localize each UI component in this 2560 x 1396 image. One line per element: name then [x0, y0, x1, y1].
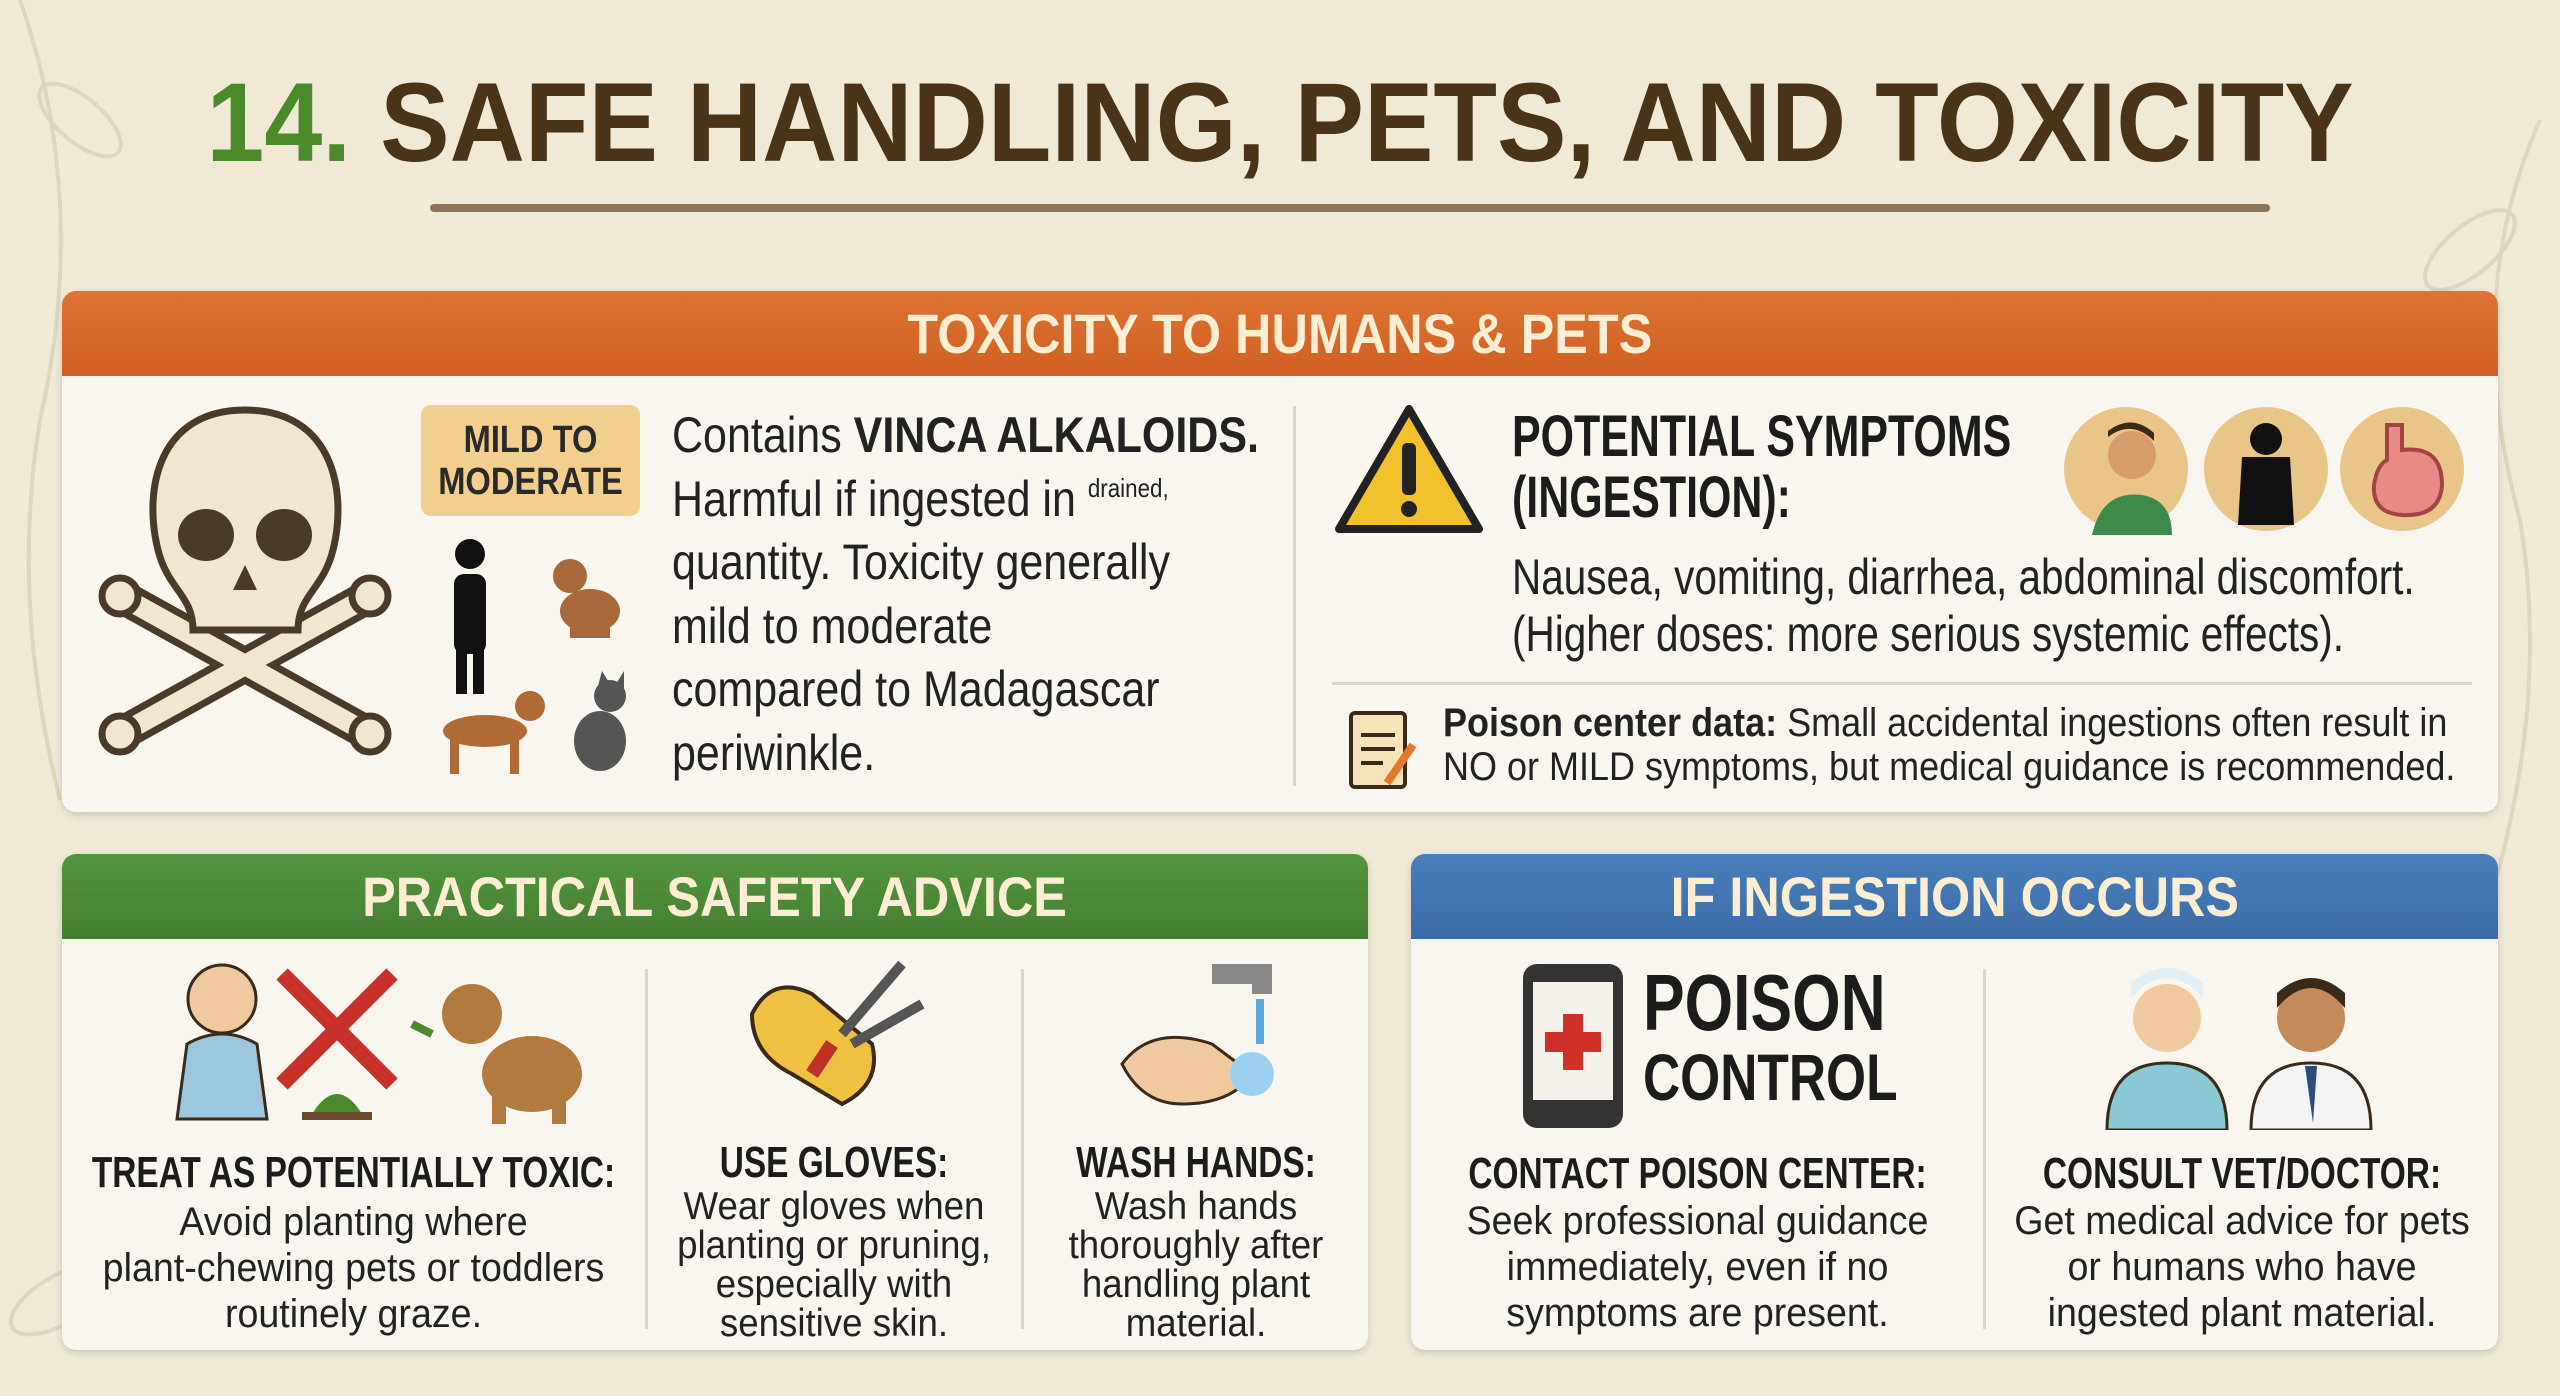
- icon: baby, cross, dog: [175, 964, 582, 1124]
- heading: potential symptoms: [1512, 404, 2011, 530]
- text: treat as potentially toxic: [92, 1148, 615, 1336]
- text: use gloves: Wear gloves when: [684, 1185, 984, 1228]
- icon: skull and crossbones: [98, 406, 392, 756]
- header: if ingestion occurs: [1411, 854, 2498, 939]
- text: treat as potentially toxic: Avoid planting where: [179, 1200, 528, 1244]
- text: wash hands: [1069, 1138, 1323, 1345]
- text: poison control: POISON: [1643, 958, 1886, 1047]
- text: contact poison center: Seek professional guidance: [1467, 1199, 1928, 1243]
- header: practical safety advice: [62, 854, 1368, 939]
- text: wash hands: Wash hands: [1095, 1185, 1297, 1228]
- text: use gloves: especially with: [716, 1263, 952, 1306]
- panel: if ingestion occurs: [1411, 854, 2498, 1350]
- text: consult vet/doctor: CONSULT VET/DOCTOR:: [2043, 1149, 2441, 1198]
- text: vinca alkaloids: [672, 407, 1259, 780]
- icon: notepad: [1349, 711, 1416, 789]
- icon: phone with cross: [1523, 964, 1623, 1128]
- text: poison center data: NO or MILD symptoms, but medical guidance is recommended.: [1443, 745, 2455, 789]
- header: toxicity: TOXICITY TO HUMANS & PETS: [908, 302, 1652, 365]
- text: vinca alkaloids: compared to Madagascar: [672, 661, 1160, 717]
- text: consult vet/doctor: [2014, 1149, 2470, 1335]
- text: symptoms list: (Higher doses: more serious systemic effects).: [1512, 606, 2344, 662]
- text: symptoms list: [1512, 549, 2415, 662]
- text: wash hands: thoroughly after: [1069, 1224, 1323, 1267]
- text: treat as potentially toxic: routinely graze.: [225, 1292, 482, 1336]
- heading: potential symptoms: (INGESTION):: [1512, 465, 1791, 530]
- header: toxicity: [62, 291, 2498, 376]
- text: consult vet/doctor: Get medical advice for pets: [2014, 1199, 2470, 1243]
- panel: toxicity to humans & pets: [62, 291, 2498, 812]
- text: consult vet/doctor: ingested plant material.: [2048, 1291, 2436, 1335]
- title: 14. SAFE HANDLING, PETS, AND TOXICITY: [206, 60, 2354, 185]
- text: wash hands: handling plant: [1082, 1263, 1310, 1306]
- badge: mild to moderate: [421, 405, 640, 516]
- text: vinca alkaloids: quantity. Toxicity generally: [672, 534, 1170, 590]
- text: vinca alkaloids: Contains VINCA ALKALOIDS.: [672, 407, 1259, 463]
- text: poison control: [1643, 958, 1898, 1114]
- text: consult vet/doctor: or humans who have: [2067, 1245, 2417, 1289]
- icons: person and pets: [443, 539, 626, 774]
- text: vinca alkaloids: Harmful if ingested in drained,: [672, 470, 1169, 526]
- text: contact poison center: symptoms are present.: [1506, 1291, 1889, 1335]
- text: use gloves: planting or pruning,: [677, 1224, 991, 1267]
- heading: potential symptoms: POTENTIAL SYMPTOMS: [1512, 404, 2011, 469]
- text: contact poison center: CONTACT POISON CENTER:: [1468, 1149, 1927, 1198]
- text: poison center data: Poison center data: Small accidental ingestions often result in: [1443, 701, 2447, 745]
- header: if ingestion occurs: IF INGESTION OCCURS: [1670, 865, 2239, 928]
- badge: mild to moderate: MILD TO: [464, 419, 597, 461]
- text: poison control: CONTROL: [1643, 1040, 1898, 1114]
- text: vinca alkaloids: periwinkle.: [672, 724, 875, 780]
- text: poison center data: [1443, 701, 2455, 789]
- text: treat as potentially toxic: TREAT AS POTENTIALLY TOXIC:: [92, 1148, 615, 1197]
- text: symptoms list: Nausea, vomiting, diarrhea, abdominal discomfort.: [1512, 549, 2415, 605]
- text: vinca alkaloids: mild to moderate: [672, 598, 992, 654]
- icons: symptom circles: [2064, 407, 2464, 535]
- text: treat as potentially toxic: plant-chewing pets or toddlers: [103, 1246, 604, 1290]
- title underline: [430, 204, 2270, 212]
- badge: mild to moderate: MODERATE: [438, 461, 623, 503]
- text: wash hands: WASH HANDS:: [1076, 1138, 1316, 1187]
- text: use gloves: [677, 1138, 991, 1345]
- text: wash hands: material.: [1126, 1302, 1266, 1345]
- icon: washing hands: [1120, 964, 1274, 1106]
- icon: nurse and doctor: [2106, 968, 2372, 1130]
- text: use gloves: USE GLOVES:: [720, 1138, 948, 1187]
- text: contact poison center: immediately, even if no: [1507, 1245, 1888, 1289]
- header: practical safety advice: PRACTICAL SAFETY ADVICE: [363, 865, 1067, 928]
- icon: warning triangle: [1335, 405, 1483, 533]
- panel: practical safety advice: [62, 854, 1368, 1350]
- text: contact poison center: [1467, 1149, 1928, 1335]
- text: use gloves: sensitive skin.: [720, 1302, 948, 1345]
- icon: gloves and pruners: [750, 960, 924, 1106]
